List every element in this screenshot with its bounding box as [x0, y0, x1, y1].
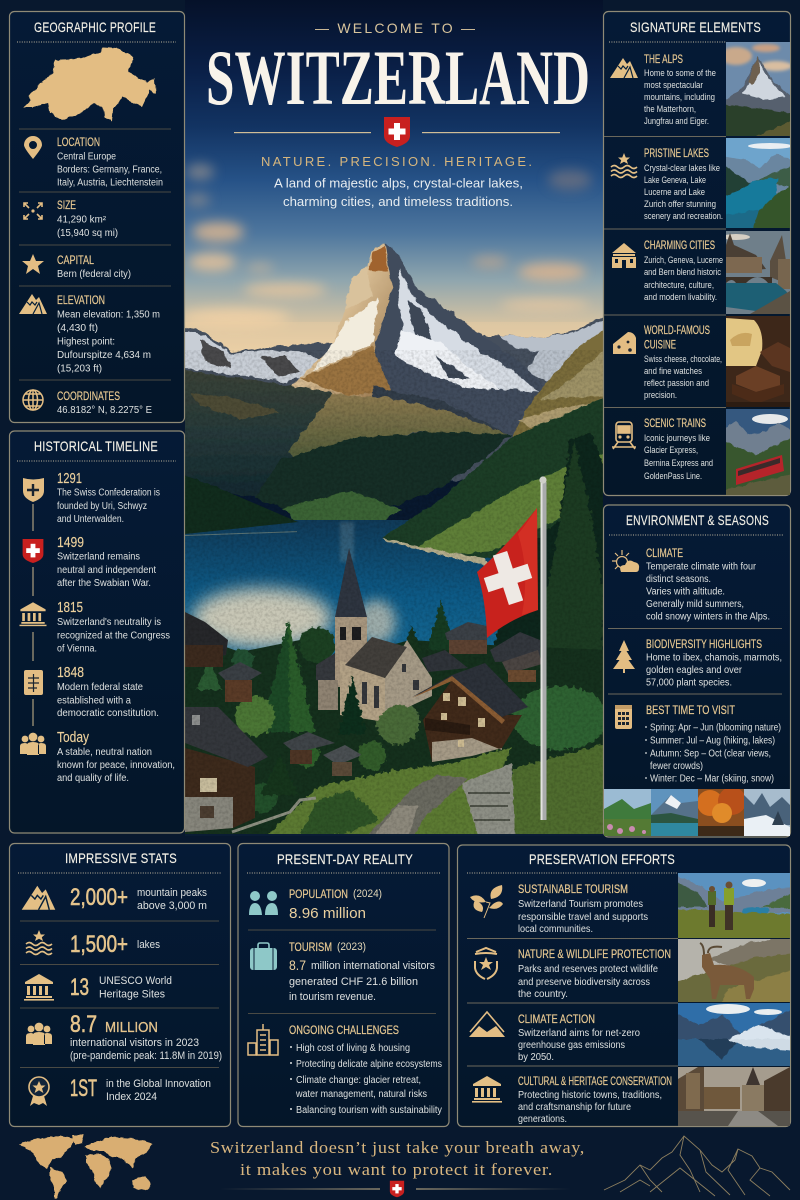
panel: signature elements — [604, 12, 796, 501]
size: 41,290 km² — [57, 214, 107, 226]
left foreground house — [185, 748, 255, 832]
elevation: Dufourspitze 4,634 m — [57, 350, 151, 361]
grass — [262, 742, 610, 840]
population: POPULATION — [289, 887, 348, 901]
1848: 1848 — [57, 664, 84, 681]
tourism — [250, 940, 435, 1003]
location — [24, 135, 163, 188]
population: (2024) — [353, 888, 382, 900]
icon: mountain — [19, 294, 47, 314]
icon: calendar — [615, 705, 632, 729]
cultural and heritage: Protecting historic towns, traditions, — [518, 1090, 662, 1101]
today: known for peace, innovation, — [57, 760, 175, 771]
seasonal photo strip — [604, 787, 790, 836]
stat: innovation index — [29, 1075, 211, 1106]
climate action: by 2050. — [518, 1052, 554, 1063]
ongoing challenges: Protecting delicate alpine ecosystems — [296, 1059, 442, 1070]
icon: people — [20, 733, 46, 755]
location: LOCATION — [57, 135, 100, 149]
1815 — [20, 599, 170, 654]
scenic trains: Iconic journeys like — [644, 433, 710, 443]
biodiversity: Home to ibex, chamois, marmots, — [646, 652, 782, 664]
elevation: Highest point: — [57, 336, 115, 348]
icon: lake and star — [611, 153, 637, 178]
intro text: A land of majestic alps, crystal-clear lakes, — [274, 176, 523, 190]
scenic trains: Glacier Express, — [644, 445, 698, 455]
elevation — [19, 293, 160, 374]
Switzerland map — [24, 47, 156, 122]
climate: cold snowy winters in the Alps. — [646, 612, 770, 622]
hero title block — [206, 20, 590, 209]
1848: democratic constitution. — [57, 708, 159, 719]
the alps: THE ALPS — [644, 52, 683, 66]
nature and wildlife: Parks and reserves protect wildlife — [518, 964, 659, 975]
heading: SIGNATURE ELEMENTS — [630, 19, 761, 35]
the alps: mountains, including — [644, 92, 715, 102]
pristine lakes: Lucerne and Lake — [644, 187, 705, 197]
1499: after the Swabian War. — [57, 578, 151, 589]
climate: CLIMATE — [646, 546, 683, 560]
panel: historical timeline — [10, 431, 184, 833]
intro text — [274, 176, 523, 209]
title rule and Swiss shield — [234, 117, 560, 147]
icon: map pin — [24, 136, 42, 159]
climate: Varies with altitude. — [646, 586, 725, 598]
world-famous cuisine: precision. — [644, 390, 677, 400]
best time to visit — [615, 703, 781, 784]
elevation: (15,203 ft) — [57, 364, 102, 374]
icon: two people — [249, 891, 278, 915]
nature and wildlife: the country. — [518, 989, 568, 1000]
stat: lakes — [26, 930, 160, 958]
tourism: TOURISM — [289, 940, 332, 954]
ongoing challenges: High cost of living & housing — [296, 1043, 410, 1054]
icon: star — [22, 254, 44, 274]
stat: innovation index: 1ST — [70, 1075, 97, 1102]
icon: shield with star — [475, 948, 497, 979]
1848: established with a — [57, 696, 132, 706]
coordinates — [23, 389, 152, 416]
stat: international visitors: international visitors in 2023 — [70, 1037, 199, 1049]
size: (15,940 sq mi) — [57, 228, 118, 239]
1499: neutral and independent — [57, 565, 156, 576]
Matterhorn sunlit face — [290, 242, 392, 420]
coordinates: COORDINATES — [57, 389, 120, 403]
tourism: (2023) — [337, 941, 366, 953]
population — [249, 887, 382, 922]
1848: Modern federal state — [57, 682, 144, 693]
footer quote: Switzerland doesn’t just take your breath away, — [210, 1138, 585, 1157]
1815: 1815 — [57, 599, 83, 616]
capital: Bern (federal city) — [57, 269, 131, 280]
climate action: greenhouse gas emissions — [518, 1040, 625, 1051]
stat: international visitors: MILLION — [105, 1019, 158, 1036]
nature and wildlife: and preserve biodiversity across — [518, 977, 650, 988]
tourism: generated CHF 21.6 billion — [289, 976, 418, 988]
charming cities: CHARMING CITIES — [644, 238, 715, 252]
climate: distinct seasons. — [646, 574, 711, 585]
sustainable tourism — [470, 873, 796, 943]
pristine lakes — [611, 138, 796, 234]
Matterhorn shadow face — [372, 242, 548, 436]
size: SIZE — [57, 198, 76, 212]
icon: Swiss shield — [23, 539, 43, 563]
scenic trains: GoldenPass Line. — [644, 471, 702, 481]
world-famous cuisine: reflect passion and — [644, 378, 709, 388]
icon: mountain — [610, 58, 638, 78]
centre forest — [255, 432, 512, 508]
ongoing challenges: ONGOING CHALLENGES — [289, 1023, 399, 1037]
pristine lakes: Zurich offer stunning — [644, 199, 716, 209]
slate shoulder under the peak — [370, 385, 510, 440]
world-famous cuisine: CUISINE — [644, 338, 676, 352]
ongoing challenges: Climate change: glacier retreat, — [296, 1075, 421, 1086]
back houses — [445, 622, 487, 640]
1291: and Unterwalden. — [57, 514, 124, 525]
scenic trains: SCENIC TRAINS — [644, 416, 706, 430]
location: Italy, Austria, Liechtenstein — [57, 178, 163, 188]
size — [24, 198, 118, 239]
hero scene: Matterhorn, lake and village — [185, 30, 603, 834]
icon: constitution document — [24, 670, 43, 695]
1291: 1291 — [57, 470, 82, 487]
tagline: NATURE. PRECISION. HERITAGE. — [261, 154, 532, 169]
scenic trains: Bernina Express and — [644, 458, 713, 468]
footer world map — [19, 1135, 153, 1199]
today — [20, 729, 175, 784]
biodiversity — [613, 637, 782, 688]
elevation: (4,430 ft) — [57, 323, 98, 334]
icon: temple — [472, 1076, 502, 1103]
icon: lake and star — [26, 930, 52, 954]
icon: mountains outline — [469, 1012, 505, 1037]
heading: GEOGRAPHIC PROFILE — [34, 19, 156, 35]
icon: globe — [23, 390, 43, 410]
the alps — [610, 42, 796, 142]
population: 8.96 million — [289, 905, 366, 922]
sustainable tourism: Switzerland Tourism promotes — [518, 899, 643, 910]
icon: expand arrows — [24, 203, 42, 219]
pristine lakes: Lake Geneva, Lake — [644, 175, 706, 185]
charming cities: architecture, culture, — [644, 280, 714, 290]
location: Central Europe — [57, 152, 116, 162]
footer quote — [210, 1138, 585, 1179]
path to the left — [232, 798, 316, 832]
today: A stable, neutral nation — [57, 747, 152, 758]
1848 — [24, 664, 159, 719]
ongoing challenges: Balancing tourism with sustainability — [296, 1105, 442, 1116]
icon: town building — [612, 243, 636, 268]
cultural and heritage: generations. — [518, 1114, 567, 1125]
elevation: Mean elevation: 1,350 m — [57, 310, 160, 320]
charming cities — [612, 231, 790, 314]
stat: UNESCO sites — [24, 974, 172, 1001]
stat: lakes: lakes — [137, 939, 160, 951]
best time to visit: Winter: Dec – Mar (skiing, snow) — [650, 774, 774, 784]
1499: Switzerland remains — [57, 552, 140, 562]
panel: environment and seasons — [604, 505, 790, 837]
1291: founded by Uri, Schwyz — [57, 501, 147, 512]
icon: city buildings — [248, 1024, 278, 1055]
capital: CAPITAL — [57, 253, 94, 267]
centre gold ridge — [288, 394, 508, 460]
photo: Matterhorn — [726, 42, 790, 136]
1499 — [23, 534, 156, 589]
photo: old town — [726, 231, 790, 314]
stat: UNESCO sites: Heritage Sites — [99, 988, 165, 1000]
icon: train — [612, 422, 636, 449]
photo: cheese and chocolate — [726, 316, 790, 407]
biodiversity: golden eagles and over — [646, 665, 743, 676]
best time to visit: Autumn: Sep – Oct (clear views, — [650, 748, 771, 760]
1815: of Vienna. — [57, 644, 97, 654]
ongoing challenges: water management, natural risks — [295, 1089, 427, 1100]
icon: mountain — [22, 886, 55, 910]
world-famous cuisine: and fine watches — [644, 366, 702, 376]
elevation: ELEVATION — [57, 293, 105, 307]
cultural and heritage: CULTURAL & HERITAGE CONSERVATION — [518, 1074, 672, 1088]
right hillside — [512, 325, 610, 470]
heading: PRESENT-DAY REALITY — [277, 851, 413, 867]
footer quote: it makes you want to protect it forever. — [240, 1160, 553, 1179]
nature and wildlife — [475, 935, 796, 1009]
chalet — [423, 680, 522, 762]
rock and stone path — [365, 763, 515, 838]
stat: mountain peaks — [22, 884, 207, 912]
welcome overline: — WELCOME TO — — [315, 20, 475, 36]
tourism: million international visitors — [311, 960, 435, 972]
best time to visit: fewer crowds) — [650, 761, 703, 772]
icon: people — [26, 1023, 52, 1045]
stat: international visitors — [26, 1011, 222, 1062]
stat: mountain peaks: above 3,000 m — [137, 900, 207, 912]
flag pole — [540, 482, 546, 820]
1291 — [23, 470, 160, 525]
church — [335, 548, 367, 617]
1499: 1499 — [57, 534, 84, 551]
cultural and heritage — [472, 1067, 790, 1126]
stat: mountain peaks: mountain peaks — [137, 887, 207, 899]
coordinates: 46.8182° N, 8.2275° E — [57, 405, 152, 416]
icon: medal — [29, 1077, 49, 1106]
cultural and heritage: and craftsmanship for future — [518, 1102, 632, 1113]
photo: red train — [726, 409, 790, 495]
icon: temple — [24, 974, 54, 1001]
sustainable tourism: local communities. — [518, 924, 593, 935]
footer divider with Swiss shield — [220, 1181, 571, 1197]
foreground ground — [185, 625, 610, 840]
ongoing challenges — [248, 1023, 442, 1116]
title: SWITZERLAND — [206, 34, 590, 121]
pristine lakes: PRISTINE LAKES — [644, 146, 709, 160]
stat: international visitors: (pre-pandemic peak: 11.8M in 2019) — [70, 1050, 222, 1062]
tourism: 8.7 — [289, 957, 306, 973]
scenic trains — [612, 409, 796, 501]
climate action: CLIMATE ACTION — [518, 1012, 595, 1026]
tourism: in tourism revenue. — [289, 991, 376, 1003]
pristine lakes: scenery and recreation. — [644, 211, 723, 221]
intro text: charming cities, and timeless traditions. — [283, 194, 513, 209]
icon: leaves — [470, 885, 503, 918]
foreground trees — [196, 600, 608, 813]
best time to visit: BEST TIME TO VISIT — [646, 703, 736, 717]
1815: recognized at the Congress — [57, 630, 170, 642]
photo: alpine lake — [726, 138, 790, 228]
icon: cheese — [613, 332, 636, 354]
icon: suitcase — [250, 943, 277, 970]
1291: The Swiss Confederation is — [57, 488, 160, 498]
church-front trees — [338, 675, 418, 770]
photo: historic square — [678, 1067, 790, 1126]
footer mountain line art — [604, 1136, 790, 1196]
icon: gold shield — [23, 478, 44, 502]
panel: geographic profile — [10, 12, 184, 422]
sustainable tourism: responsible travel and supports — [518, 912, 648, 923]
today: Today — [57, 729, 89, 746]
icon: temple — [20, 602, 46, 626]
stat: UNESCO sites: 13 — [70, 974, 89, 1001]
climate action — [469, 1003, 796, 1066]
charming cities: Zurich, Geneva, Lucerne — [644, 255, 723, 265]
the alps: most spectacular — [644, 80, 703, 90]
stat: lakes: 1,500+ — [70, 931, 128, 958]
lake — [185, 520, 503, 690]
world-famous cuisine: WORLD-FAMOUS — [644, 323, 710, 337]
stat: innovation index: Index 2024 — [106, 1091, 157, 1103]
stat: international visitors: 8.7 — [70, 1011, 97, 1038]
panel: preservation efforts — [458, 845, 796, 1126]
sustainable tourism: SUSTAINABLE TOURISM — [518, 882, 628, 896]
village left cluster — [185, 612, 228, 665]
Swiss flag — [477, 508, 538, 638]
left shore forest — [170, 470, 300, 542]
texture over the valley — [185, 350, 603, 835]
icon: pine tree — [613, 640, 635, 673]
climate — [612, 546, 770, 622]
stat: innovation index: in the Global Innovation — [106, 1078, 211, 1090]
the alps: Jungfrau and Eiger. — [644, 116, 709, 126]
charming cities: and modern livability. — [644, 292, 717, 302]
charming cities: and Bern blend historic — [644, 267, 721, 277]
location: Borders: Germany, France, — [57, 164, 162, 176]
nature and wildlife: NATURE & WILDLIFE PROTECTION — [518, 947, 671, 961]
stat: mountain peaks: 2,000+ — [70, 884, 128, 911]
best time to visit: Summer: Jul – Aug (hiking, lakes) — [650, 736, 775, 746]
capital — [22, 253, 131, 280]
far snowy ranges — [170, 312, 615, 480]
today: and quality of life. — [57, 773, 129, 784]
world-famous cuisine: Swiss cheese, chocolate, — [644, 354, 722, 364]
panel: impressive stats — [10, 844, 230, 1126]
climate: Generally mild summers, — [646, 599, 744, 610]
icon: sun and cloud — [612, 550, 639, 572]
pristine lakes: Crystal-clear lakes like — [644, 163, 720, 173]
heading: PRESERVATION EFFORTS — [529, 851, 675, 867]
climate: Temperate climate with four — [646, 562, 757, 572]
photo: ibex — [678, 939, 790, 1002]
1815: Switzerland's neutrality is — [57, 617, 161, 628]
world-famous cuisine — [613, 316, 790, 407]
dark tree mass — [480, 432, 610, 700]
biodiversity: 57,000 plant species. — [646, 678, 732, 688]
panel: present-day reality — [238, 844, 449, 1126]
mountains with rugged edges — [170, 242, 615, 542]
photo: glacier lake — [678, 1003, 790, 1066]
photo: hikers — [678, 873, 790, 938]
the alps: the Matterhorn, — [644, 104, 696, 114]
climate action: Switzerland aims for net-zero — [518, 1028, 641, 1039]
left dark slopes — [170, 368, 345, 500]
stat: UNESCO sites: UNESCO World — [99, 975, 172, 987]
the alps: Home to some of the — [644, 68, 716, 78]
heading: HISTORICAL TIMELINE — [34, 438, 158, 454]
heading: IMPRESSIVE STATS — [65, 850, 177, 866]
